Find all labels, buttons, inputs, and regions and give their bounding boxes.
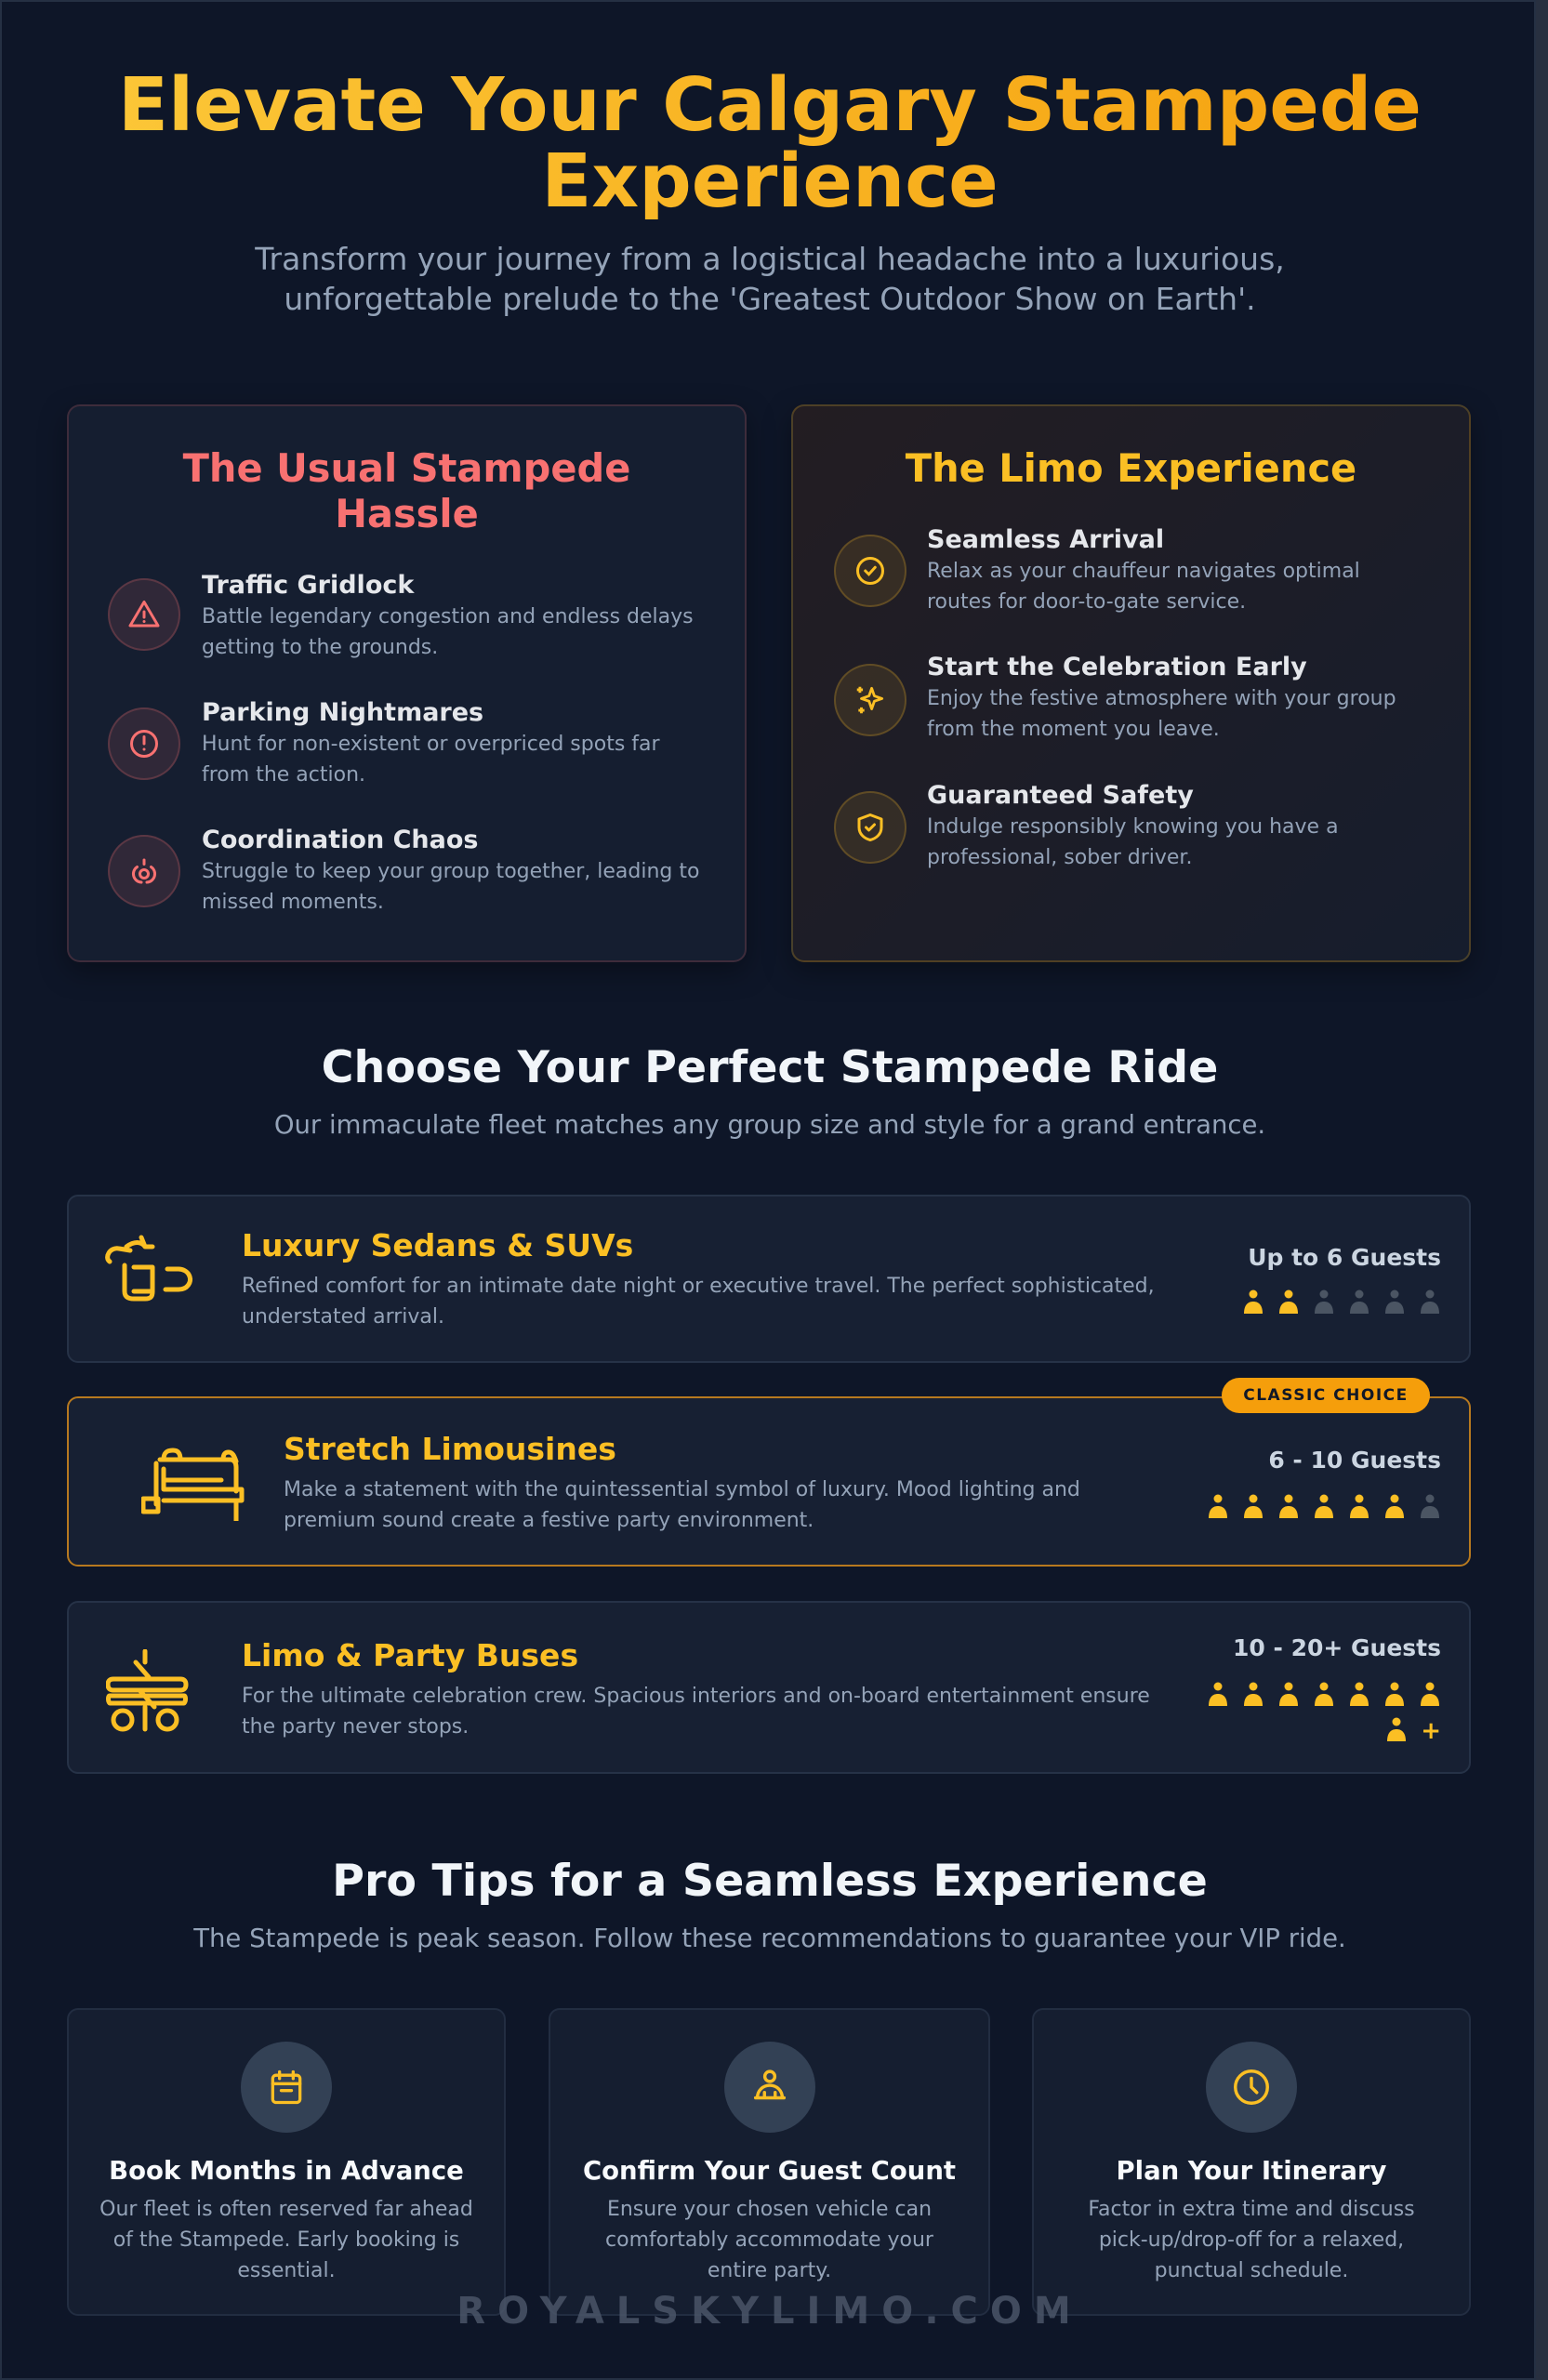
heading: choose ride: Choose Your Perfect Stampede Ride: [322, 1042, 1218, 1093]
description: [242, 1275, 1155, 1329]
icon: sedan: [105, 1235, 193, 1302]
icon: clock: [1206, 2042, 1297, 2133]
guests label: 10 - 20+ Guests: [1233, 1634, 1441, 1661]
icon: shield: [834, 791, 906, 864]
icon: bus: [106, 1649, 188, 1731]
icon: check: [834, 535, 906, 607]
tip text: of the Stampede. Early booking is: [113, 2228, 459, 2252]
icon: parking: [108, 707, 180, 780]
tip title: Plan Your Itinerary: [1117, 2156, 1386, 2186]
item: coordination chaos: missed moments.: [202, 891, 384, 914]
subheading: Our immaculate fleet matches any group size and style for a grand entrance.: [274, 1110, 1265, 1140]
subtitle: Transform your journey from a logistical headache into a luxurious,: [255, 241, 1285, 277]
item: seamless arrival: [927, 525, 1360, 614]
tip text: Factor in extra time and discuss: [1088, 2198, 1415, 2221]
item: parking nightmares: Hunt for non-existent or overpriced spots far: [202, 733, 660, 756]
title: Luxury Sedans & SUVs: [242, 1227, 633, 1263]
tip text: [99, 2198, 473, 2282]
card: sedans: [67, 1195, 1471, 1363]
tip title: Book Months in Advance: [109, 2156, 464, 2186]
tip text: Ensure your chosen vehicle can: [607, 2198, 932, 2221]
description: the party never stops.: [242, 1715, 469, 1739]
capacity icons: [1209, 1683, 1439, 1706]
tip text: entire party.: [708, 2259, 831, 2282]
icon: limousine: [141, 1448, 244, 1521]
capacity icons: [1244, 1290, 1439, 1314]
tip card: guest count: [549, 2008, 990, 2316]
item: seamless arrival: routes for door-to-gate service.: [927, 590, 1246, 614]
title: Stretch Limousines: [284, 1431, 616, 1467]
panel heading: Hassle: [335, 491, 479, 536]
tip text: [605, 2198, 933, 2282]
tip text: Our fleet is often reserved far ahead: [99, 2198, 473, 2221]
tip text: essential.: [237, 2259, 336, 2282]
description: [242, 1685, 1150, 1739]
tip text: comfortably accommodate your: [605, 2228, 933, 2252]
title: Elevate Your Calgary Stampede: [118, 62, 1422, 148]
description: [284, 1478, 1080, 1532]
description: premium sound create a festive party environment.: [284, 1509, 814, 1532]
panel heading: The Usual Stampede: [183, 445, 630, 491]
description: For the ultimate celebration crew. Spacious interiors and on-board entertainment ensure: [242, 1685, 1150, 1708]
item: coordination chaos: [202, 826, 699, 914]
capacity plus: +: [1421, 1717, 1441, 1745]
heading: pro tips: Pro Tips for a Seamless Experience: [332, 1856, 1208, 1907]
panel heading: The Limo Experience: [906, 445, 1356, 491]
item: start early: from the moment you leave.: [927, 718, 1220, 741]
panel: usual hassle: [67, 404, 747, 962]
watermark: ROYALSKYLIMO.COM: [456, 2290, 1083, 2333]
icon: people: [723, 2042, 814, 2133]
title: Limo & Party Buses: [242, 1637, 578, 1673]
item: safety: professional, sober driver.: [927, 846, 1192, 869]
tip card: itinerary: [1032, 2008, 1471, 2316]
icon: chaos: [108, 835, 180, 907]
guests label: Up to 6 Guests: [1248, 1244, 1441, 1271]
item: parking nightmares: Parking Nightmares: [202, 698, 483, 727]
panel: limo experience: [791, 404, 1471, 962]
item: safety: Indulge responsibly knowing you have a: [927, 815, 1339, 839]
capacity plus: [1387, 1717, 1441, 1745]
item: seamless arrival: Relax as your chauffeur navigates optimal: [927, 560, 1360, 583]
guests label: 6 - 10 Guests: [1268, 1447, 1441, 1474]
card: party buses: [67, 1601, 1471, 1774]
item: start early: Enjoy the festive atmosphere with your group: [927, 687, 1396, 710]
item: traffic gridlock: Battle legendary congestion and endless delays: [202, 605, 694, 628]
tip text: punctual schedule.: [1155, 2259, 1348, 2282]
item: start early: [927, 653, 1396, 741]
capacity icons: [1209, 1495, 1439, 1518]
tip title: Confirm Your Guest Count: [583, 2156, 956, 2186]
item: coordination chaos: Struggle to keep your group together, leading to: [202, 860, 699, 883]
tip text: pick-up/drop-off for a relaxed,: [1099, 2228, 1404, 2252]
card: stretch limousines: [67, 1396, 1471, 1567]
description: Make a statement with the quintessential symbol of luxury. Mood lighting and: [284, 1478, 1080, 1501]
item: parking nightmares: from the action.: [202, 763, 365, 787]
item: start early: Start the Celebration Early: [927, 653, 1307, 681]
item: seamless arrival: Seamless Arrival: [927, 525, 1164, 554]
subtitle: unforgettable prelude to the 'Greatest Outdoor Show on Earth'.: [284, 281, 1256, 317]
tip text: [1088, 2198, 1415, 2282]
badge: classic choice: [1222, 1378, 1430, 1413]
item: safety: Guaranteed Safety: [927, 781, 1194, 810]
item: parking nightmares: [202, 698, 660, 787]
item: traffic gridlock: getting to the grounds.: [202, 636, 438, 659]
tip card: book: [67, 2008, 506, 2316]
icon: sparkle: [834, 664, 906, 736]
item: traffic gridlock: Traffic Gridlock: [202, 571, 414, 600]
badge: classic choice: CLASSIC CHOICE: [1243, 1386, 1409, 1405]
item: safety: [927, 781, 1339, 869]
panel heading: [182, 445, 630, 536]
item: coordination chaos: Coordination Chaos: [202, 826, 478, 854]
subtitle: [255, 241, 1285, 317]
title: [2, 67, 1538, 219]
icon: warning: [108, 578, 180, 651]
description: understated arrival.: [242, 1305, 444, 1329]
subheading: The Stampede is peak season. Follow these recommendations to guarantee your VIP ride.: [193, 1924, 1346, 1953]
description: Refined comfort for an intimate date night or executive travel. The perfect sophisticated,: [242, 1275, 1155, 1298]
title: Experience: [541, 139, 999, 224]
item: traffic gridlock: [202, 571, 694, 659]
icon: calendar: [241, 2042, 332, 2133]
